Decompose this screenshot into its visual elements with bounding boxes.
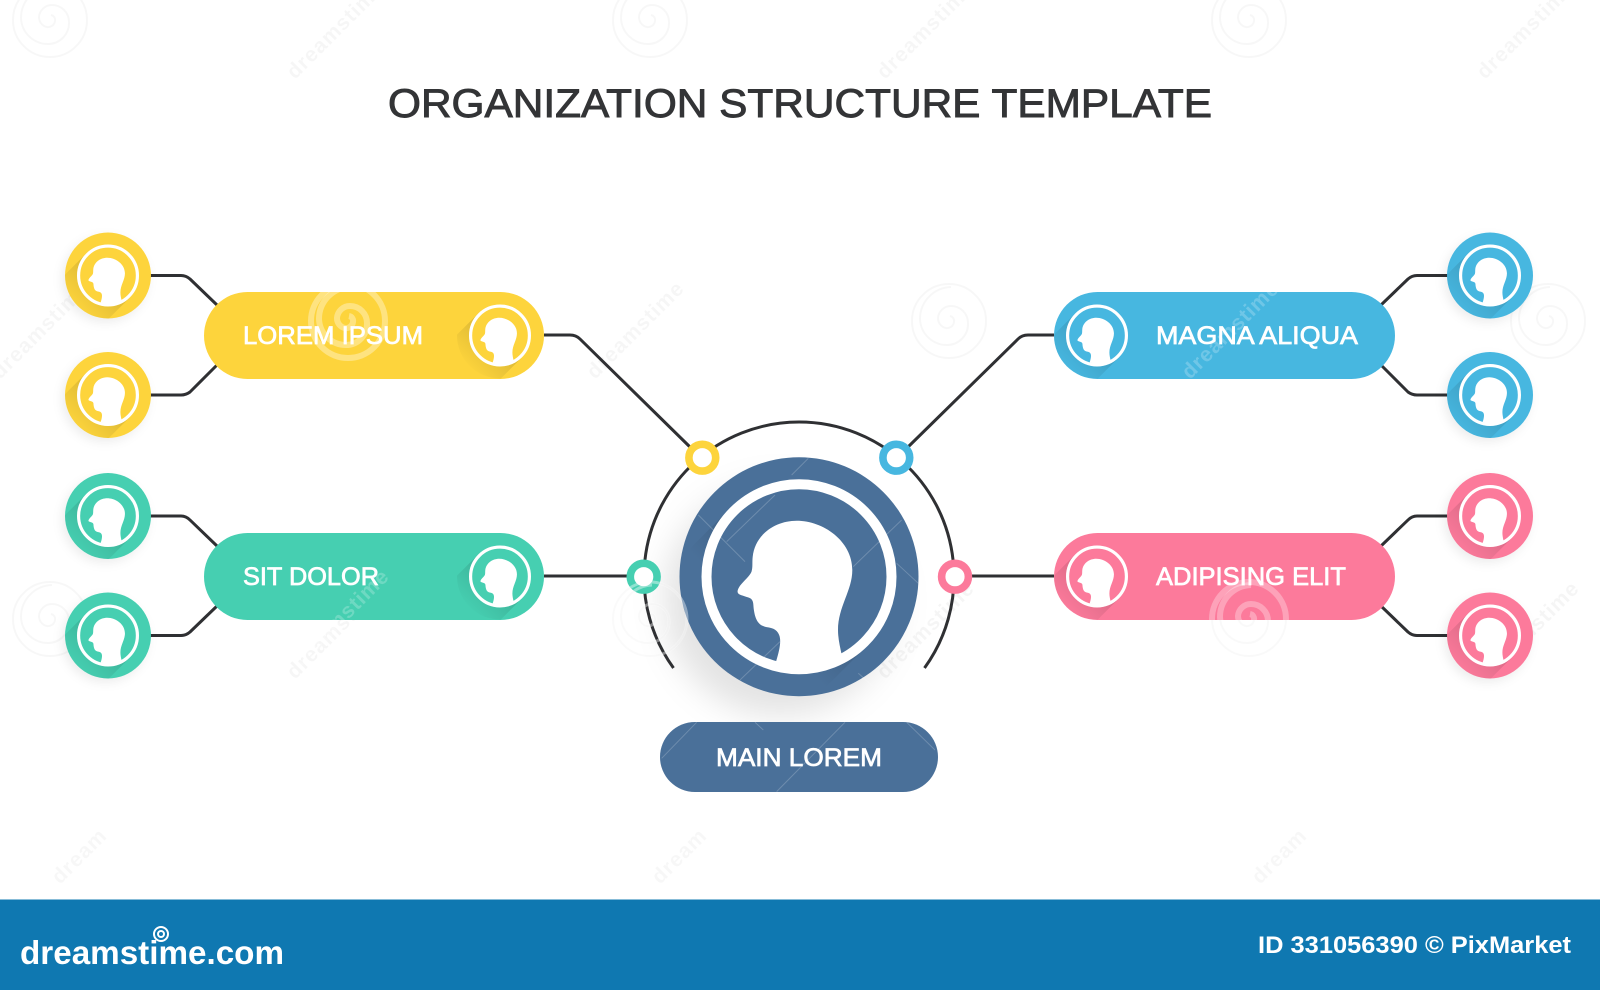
top person <box>1447 232 1533 318</box>
bottom person icon <box>1436 606 1519 690</box>
central shadow <box>664 484 896 716</box>
watermark overlay on pills: dreamstime <box>287 565 394 672</box>
central disc <box>680 457 918 696</box>
pill <box>204 292 544 379</box>
footer background <box>0 900 1600 990</box>
arc around central figure <box>644 422 954 668</box>
top person <box>65 473 151 559</box>
connector lines <box>150 276 1448 636</box>
watermark: background pattern: dreamstime <box>1477 577 1584 684</box>
pill text: MAGNA ALIQUA <box>1156 322 1358 350</box>
icon: central head <box>706 484 892 669</box>
pill text: SIT DOLOR <box>243 563 379 591</box>
bottom person <box>1447 352 1533 438</box>
footer logo text: dreamstime.com <box>20 934 284 971</box>
watermark: background pattern: dreamstime <box>282 577 389 684</box>
pill icon <box>446 306 529 390</box>
top person icon <box>1436 246 1519 330</box>
top person icon <box>1436 487 1519 570</box>
pill icon <box>446 547 529 631</box>
top person icon <box>54 246 137 330</box>
panel: magna aliqua <box>1043 232 1533 449</box>
watermark: background pattern: dream <box>47 824 112 889</box>
top person <box>65 232 151 318</box>
bottom person <box>65 352 151 438</box>
title: ORGANIZATION STRUCTURE TEMPLATE <box>388 82 1212 126</box>
node: blue <box>883 444 910 471</box>
central figure <box>680 457 918 696</box>
watermark overlay on pills: dreamstime <box>1177 277 1284 384</box>
icon: logo spiral <box>154 927 168 941</box>
bottom person <box>65 592 151 678</box>
panel: adipising elit <box>1043 473 1533 690</box>
footer band <box>0 900 1600 990</box>
top person icon <box>54 487 137 570</box>
pill icon <box>1043 306 1126 390</box>
watermark: background pattern: dreamstime <box>872 577 979 684</box>
pill icon <box>1043 547 1126 631</box>
watermark: background pattern: dream <box>647 824 712 889</box>
main label pill <box>660 722 938 792</box>
node: pink <box>942 563 968 590</box>
pill <box>204 533 544 620</box>
pill text: ADIPISING ELIT <box>1156 563 1346 591</box>
node: green <box>630 563 657 590</box>
top person <box>1447 473 1533 559</box>
panel: lorem ipsum <box>54 232 544 449</box>
pill <box>1054 533 1395 620</box>
inner shadow <box>706 518 859 670</box>
footer credit: ID 331056390 © PixMarket <box>1258 932 1571 959</box>
panel: sit dolor <box>54 473 544 690</box>
bottom person icon <box>54 606 137 690</box>
pill <box>1054 292 1395 379</box>
node: yellow <box>689 444 716 471</box>
bottom person icon <box>54 366 137 449</box>
main label text: MAIN LOREM <box>716 744 882 772</box>
pill text: LOREM IPSUM <box>243 322 423 350</box>
bottom person <box>1447 592 1533 678</box>
main label <box>660 722 938 792</box>
watermark: background pattern: dream <box>1247 824 1312 889</box>
watermark overlay on pills <box>287 277 1286 792</box>
watermark: background pattern: dreamstime <box>582 277 689 384</box>
bottom person icon <box>1436 366 1519 449</box>
